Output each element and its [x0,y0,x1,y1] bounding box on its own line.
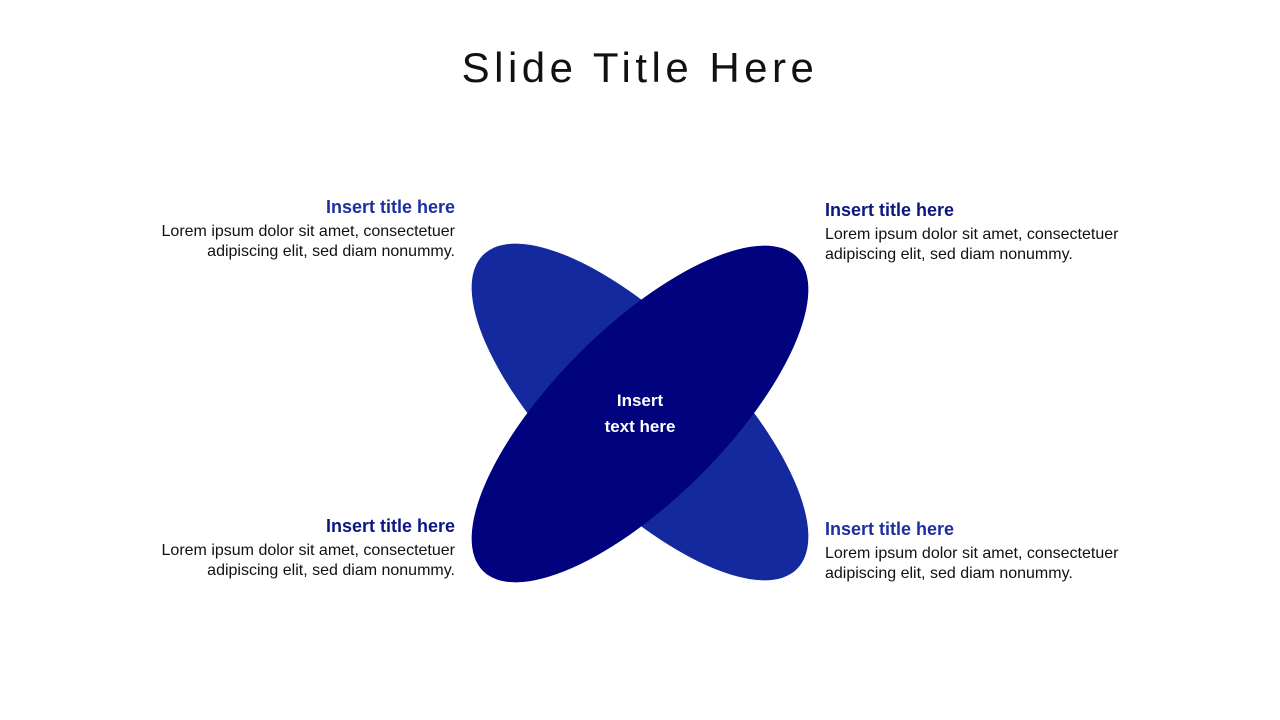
block: bottom-left: adipiscing elit, sed diam nonummy. [207,562,455,579]
block: top-left: Insert title here [326,197,455,217]
block: bottom-left [162,516,455,579]
block: bottom-right: Insert title here [825,519,954,539]
center text: text here [605,417,675,436]
ellipse: dark [422,196,858,632]
block: top-left: adipiscing elit, sed diam nonummy. [207,243,455,260]
block: bottom-right [825,519,1118,582]
block: bottom-right: adipiscing elit, sed diam nonummy. [825,565,1073,582]
block: top-left [162,197,455,260]
block: top-right: Insert title here [825,200,954,220]
block: bottom-left: Lorem ipsum dolor sit amet, consectetuer [162,542,455,559]
block: bottom-right: Lorem ipsum dolor sit amet, consectetuer [825,545,1118,562]
title: Slide Title Here [462,44,818,91]
block: top-left: Lorem ipsum dolor sit amet, consectetuer [162,223,455,240]
block: top-right: Lorem ipsum dolor sit amet, consectetuer [825,226,1118,243]
center text: Insert [617,391,663,410]
block: bottom-left: Insert title here [326,516,455,536]
ellipse: light [422,194,858,630]
block: top-right [825,200,1118,263]
block: top-right: adipiscing elit, sed diam nonummy. [825,246,1073,263]
